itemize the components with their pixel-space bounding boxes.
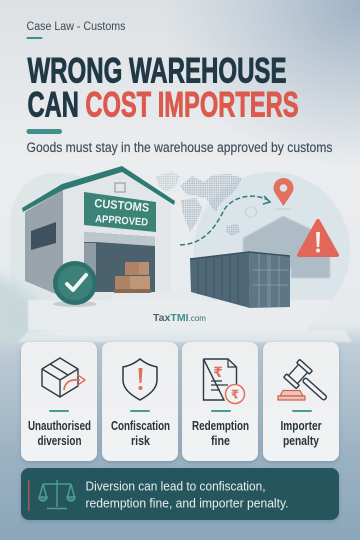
illustration: world map [156, 172, 242, 236]
customs approved sign [84, 192, 156, 232]
warehouse front wall [63, 170, 171, 297]
icon: fine document [204, 359, 244, 404]
label [192, 419, 249, 448]
illustration: blurred warehouse [243, 216, 330, 278]
customs approved sign: APPROVED [95, 213, 149, 229]
label [280, 419, 322, 448]
warehouse side window [31, 222, 56, 250]
banner text [86, 478, 288, 510]
arrow: dashed diversion route [180, 196, 270, 245]
eyebrow accent [26, 37, 42, 39]
label [28, 419, 91, 448]
banner text: redemption fine, and importer penalty. [86, 496, 288, 510]
label: Importer [280, 419, 322, 433]
card: Unauthorised diversion [21, 342, 97, 461]
label: diversion [38, 434, 82, 448]
label: Redemption [192, 419, 249, 433]
logo: TaxTMI.com: TaxTMI.com [153, 312, 206, 324]
card: Redemption fine [182, 342, 258, 461]
icon: fine document: ₹ [231, 388, 239, 402]
illustration: shipping container [190, 252, 290, 308]
icon: scales [39, 480, 75, 508]
icon: fine document: ₹ [213, 365, 223, 381]
banner text: Diversion can lead to confiscation, [86, 478, 266, 494]
icon: gavel [278, 359, 334, 408]
accent [130, 410, 150, 412]
warehouse vent [115, 183, 125, 192]
label: risk [131, 434, 150, 448]
warehouse side wall [25, 190, 63, 297]
label [111, 419, 170, 448]
eyebrow: Case Law - Customs: Case Law - Customs [26, 21, 126, 33]
label: penalty [283, 434, 319, 448]
banner accent [28, 480, 30, 511]
icon: approved check badge [53, 261, 97, 307]
icon: location pin [274, 178, 294, 209]
pallet of boxes [114, 262, 151, 293]
scene backdrop [0, 172, 352, 345]
subtitle: Goods must stay in the warehouse approved by customs [26, 140, 333, 155]
label: Unauthorised [28, 419, 91, 433]
icon: box with arrow [42, 358, 85, 397]
accent [211, 410, 231, 412]
warehouse roof [22, 166, 175, 212]
banner: conclusion [21, 468, 339, 520]
illustration: warehouse [22, 166, 175, 297]
card: Confiscation risk [102, 342, 178, 461]
label: Confiscation [111, 419, 170, 433]
icon: shield [123, 359, 157, 400]
accent [49, 410, 69, 412]
accent [292, 410, 312, 412]
customs approved sign: CUSTOMS [94, 196, 150, 215]
label: fine [211, 434, 230, 448]
title [28, 52, 298, 125]
warehouse door [84, 232, 155, 292]
icon: warning triangle [299, 221, 337, 255]
card: Importer penalty [263, 342, 339, 461]
title accent [26, 129, 62, 134]
map clock ring [246, 206, 256, 218]
